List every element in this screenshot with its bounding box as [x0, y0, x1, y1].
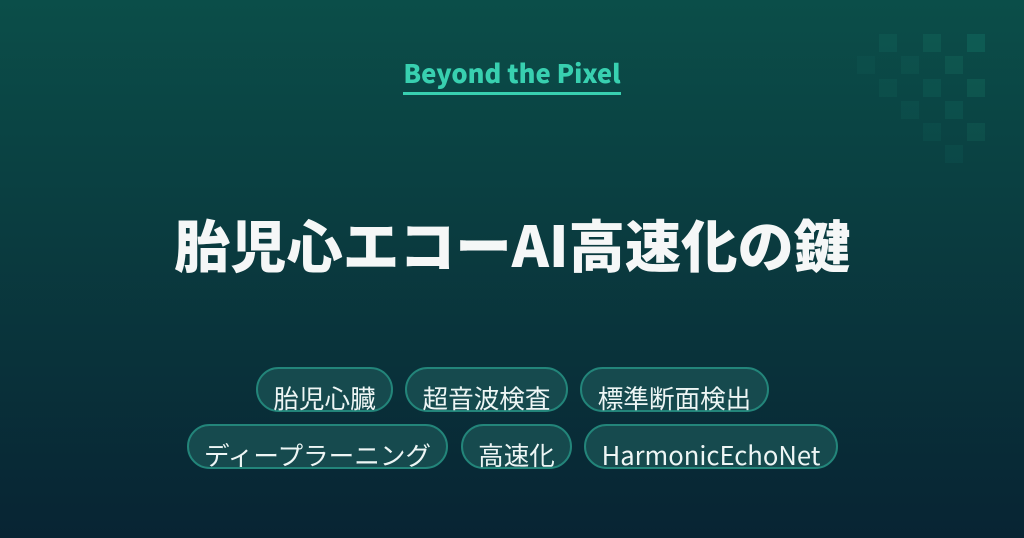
title: 胎児心エコーAI高速化の鍵 [174, 203, 850, 284]
keyword tag: 超音波検査: 超音波検査 [422, 379, 550, 416]
decorative pixel grid [879, 34, 985, 141]
keyword tag: 高速化: 高速化 [478, 436, 555, 473]
keyword tag: ディープラーニング: ディープラーニング [204, 436, 431, 473]
keyword tag: 標準断面検出 [580, 367, 769, 412]
keyword tag: HarmonicEchoNet [584, 424, 838, 469]
keyword tag: 高速化 [461, 424, 572, 469]
keyword tag: 超音波検査 [405, 367, 568, 412]
keyword tag: 胎児心臓: 胎児心臓 [273, 379, 376, 416]
eyebrow heading: Beyond the Pixel: Beyond the Pixel [403, 54, 621, 91]
keyword tag: ディープラーニング [187, 424, 448, 469]
keyword tag: HarmonicEchoNet: HarmonicEchoNet [602, 436, 820, 473]
keyword tag: 胎児心臓 [256, 367, 393, 412]
keyword tag: 標準断面検出: 標準断面検出 [598, 379, 751, 416]
